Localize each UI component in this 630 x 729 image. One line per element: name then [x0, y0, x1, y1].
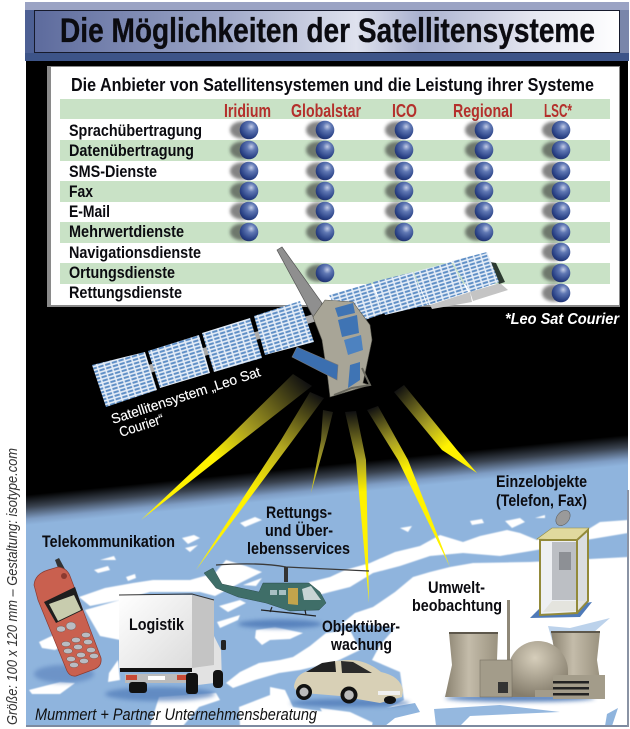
icon: car: [290, 660, 410, 707]
yellow signal beams: [141, 374, 477, 603]
label: Einzelobjekte: Einzelobjekte: [496, 473, 587, 491]
satellite label: Satellitensystem „Leo Sat: [109, 363, 262, 427]
label: Objektüberwachung: wachung: [330, 636, 392, 654]
label: Rettungs- und Überlebensservices: lebensservices: [247, 540, 350, 558]
satellite label: Courier“: [117, 410, 166, 440]
label: Rettungs- und Überlebensservices: [247, 504, 350, 558]
table panel: providers and services: [26, 61, 628, 307]
provider column headers: Globalstar: [291, 101, 361, 121]
satellite: [92, 247, 508, 407]
service row labels: Datenübertragung: [69, 142, 194, 160]
antenna blade: [277, 247, 322, 322]
icon: mobile phone: [34, 558, 101, 683]
label: Objektüberwachung: [322, 618, 400, 654]
icon: power plant: [445, 600, 605, 702]
icon: phone booth with dish: [530, 508, 592, 618]
provider column headers: LSC*: [544, 101, 572, 121]
service row labels: Sprachübertragung: [69, 122, 202, 140]
footnote: *Leo Sat Courier: [505, 311, 620, 328]
provider column headers: [224, 101, 572, 121]
availability dots: [230, 121, 570, 302]
label: Umweltbeobachtung: [412, 579, 502, 615]
icon: helicopter: [204, 564, 369, 628]
solar wing: left: [92, 301, 320, 407]
provider column headers: Regional: [453, 101, 513, 121]
service row labels: E-Mail: [69, 203, 110, 221]
satellite body: [313, 300, 372, 397]
service row labels: [69, 122, 202, 302]
label: Einzelobjekte: (Telefon, Fax): [496, 492, 587, 510]
credit: Mummert + Partner Unternehmensberatung: [35, 706, 318, 724]
service row labels: SMS-Dienste: [69, 163, 157, 181]
green row bands: [60, 99, 610, 284]
label: Objektüberwachung: Objektüber-: [322, 618, 400, 636]
title banner: [25, 2, 629, 61]
truck label: Logistik: [129, 615, 184, 634]
solar wing: right: [329, 252, 508, 327]
icon: delivery truck: [105, 594, 226, 701]
label: Einzelobjekte: [496, 473, 587, 510]
label: Rettungs- und Überlebensservices: und Über-: [265, 521, 333, 540]
provider column headers: Iridium: [224, 101, 271, 121]
service row labels: Fax: [69, 183, 94, 201]
label: Telekommunikation: Telekommunikation: [42, 533, 175, 551]
provider column headers: ICO: [392, 101, 417, 121]
label: Rettungs- und Überlebensservices: Rettungs-: [266, 504, 332, 522]
side note: Größe: 100 x 120 mm – Gestaltung: isotype.com: [5, 448, 21, 725]
label: Umweltbeobachtung: beobachtung: [412, 597, 502, 615]
service row labels: Ortungsdienste: [69, 264, 175, 282]
service row labels: Navigationsdienste: [69, 244, 201, 262]
service row labels: Mehrwertdienste: [69, 223, 184, 241]
label: Umweltbeobachtung: Umwelt-: [428, 579, 485, 597]
service row labels: Rettungsdienste: [69, 284, 182, 302]
